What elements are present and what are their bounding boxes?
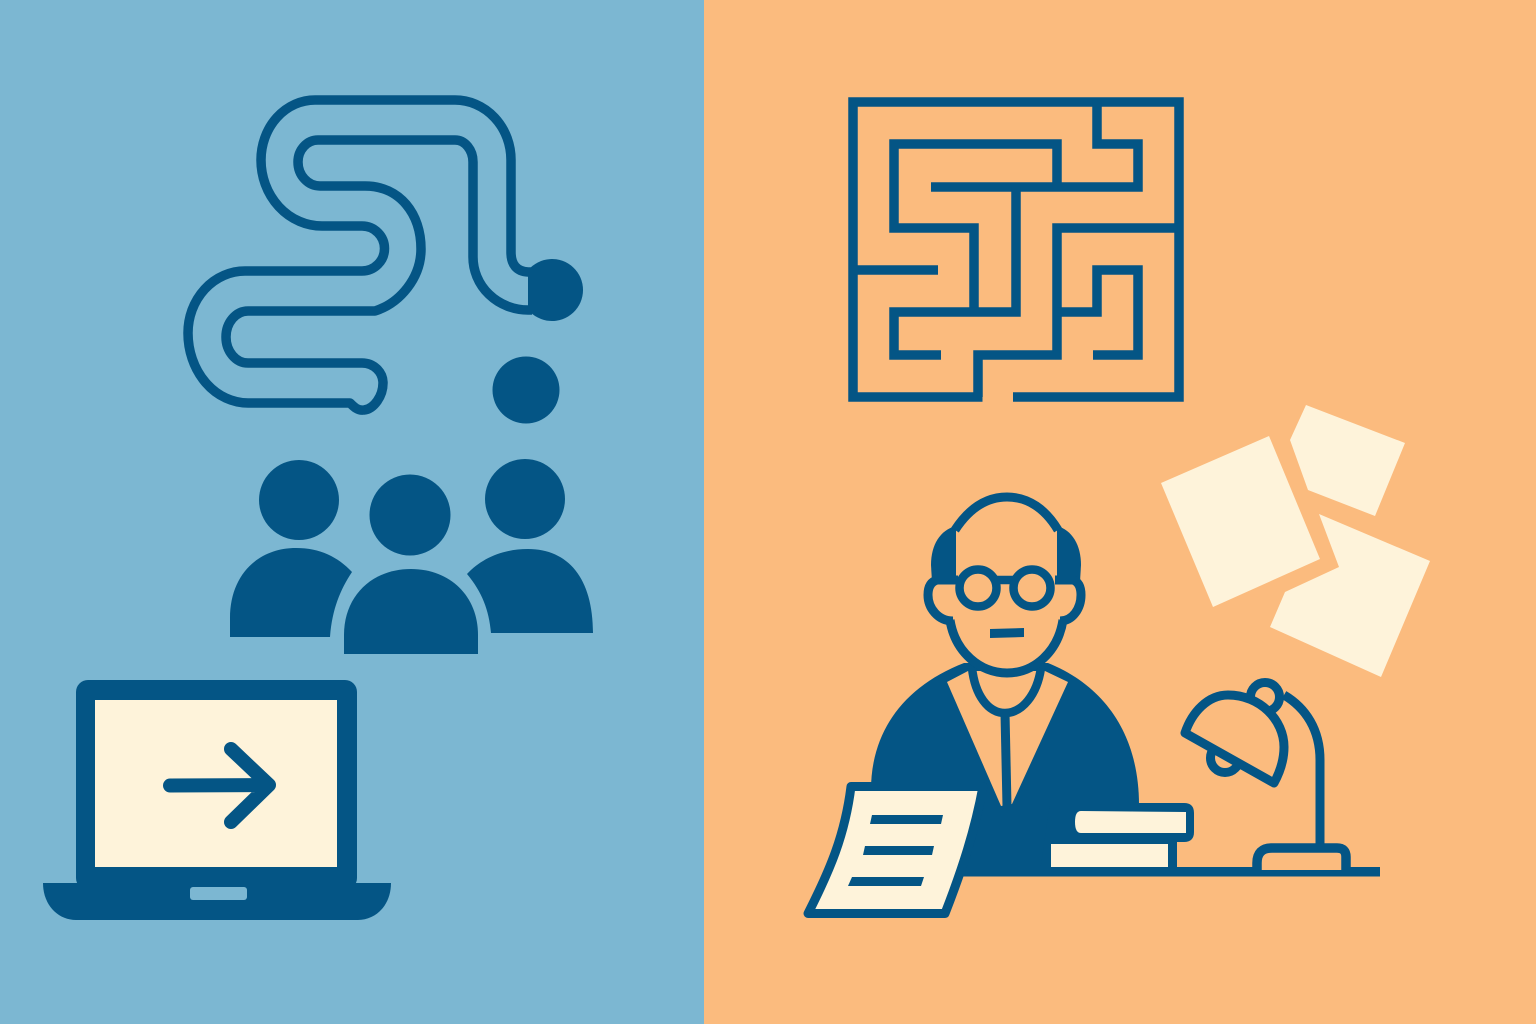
glasses	[960, 570, 1050, 606]
person middle	[344, 474, 478, 654]
winding tube outline	[188, 100, 532, 410]
laptop screen	[95, 700, 337, 867]
icon: desk lamp	[1185, 682, 1346, 870]
tie line	[1005, 713, 1007, 806]
lamp bulb	[1210, 744, 1240, 772]
bottom book	[1051, 844, 1168, 867]
neck outline	[972, 668, 1041, 713]
icon: group of three people	[230, 459, 593, 654]
lamp cap	[1250, 682, 1280, 712]
arrow on screen	[170, 749, 269, 822]
shirt collar V	[947, 671, 1068, 806]
icon: stacked books	[1040, 803, 1194, 872]
laptop lid	[76, 680, 357, 890]
note right	[1270, 514, 1430, 677]
icon: laptop with arrow	[43, 680, 391, 920]
jaw outline	[950, 620, 1063, 673]
ear right	[1055, 580, 1081, 621]
skull outline	[955, 497, 1058, 530]
ear left	[928, 580, 958, 621]
lamp shade	[1185, 695, 1284, 783]
desk line	[960, 867, 1380, 876]
hair right	[1057, 526, 1081, 582]
laptop trackpad notch	[190, 887, 247, 900]
icon: scattered sticky notes	[1161, 405, 1430, 677]
panel: left blue background	[0, 0, 704, 1024]
paper text lines	[870, 815, 943, 824]
person right	[467, 459, 593, 633]
lamp arm	[1284, 695, 1320, 846]
icon: paper note in front	[808, 786, 983, 914]
person left	[230, 460, 352, 637]
illustration: professor at desk	[871, 497, 1139, 872]
note left	[1161, 436, 1320, 607]
note top	[1290, 405, 1405, 516]
hair left	[931, 526, 956, 582]
paper sheet	[808, 786, 983, 914]
mouth	[990, 628, 1024, 638]
book stack backing	[1040, 803, 1194, 872]
icon: maze	[853, 102, 1179, 397]
panel: right orange background	[704, 0, 1536, 1024]
icon: winding path with end dots	[188, 100, 583, 424]
path end dot	[528, 259, 583, 321]
separate dot	[492, 356, 560, 424]
lamp base	[1257, 848, 1346, 870]
top book	[1075, 811, 1186, 833]
torso	[871, 663, 1139, 872]
laptop base	[43, 883, 391, 920]
face fill	[950, 497, 1063, 673]
